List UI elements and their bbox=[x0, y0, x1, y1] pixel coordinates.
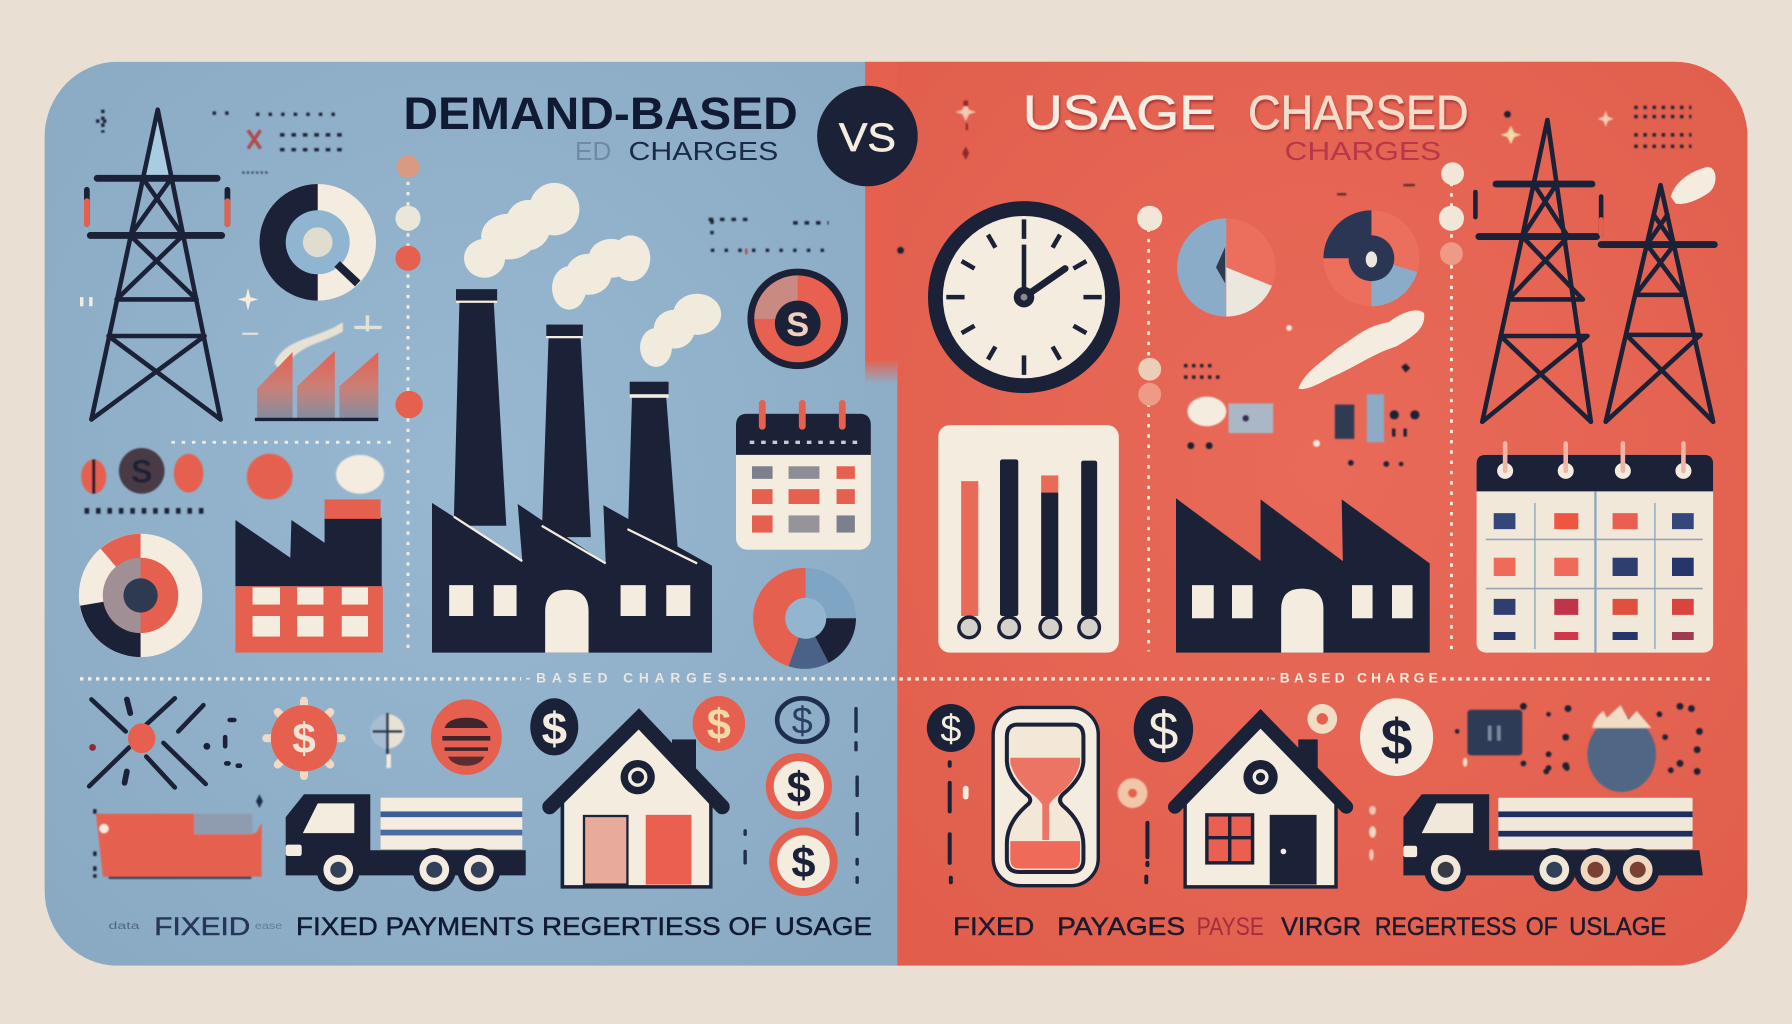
caption: right panel: VIRGR bbox=[1281, 913, 1361, 941]
icon: smoke ribbon bbox=[1298, 310, 1424, 389]
chart: donut bottom right of blue panel bbox=[753, 568, 856, 669]
small icon cluster right panel bbox=[1184, 325, 1419, 467]
icon: hourglass bbox=[993, 707, 1098, 886]
caption: left panel: data bbox=[109, 921, 140, 932]
vertical marks beside hourglass bbox=[950, 762, 1147, 882]
icon: navy dollar coin right B bbox=[1134, 696, 1193, 762]
caption: left panel bbox=[109, 913, 872, 941]
icon: mini factory roofs with smoke bbox=[255, 322, 378, 419]
chart: magnifier donut bbox=[259, 184, 376, 301]
icon: outlined dollar ring: $ bbox=[792, 700, 813, 742]
icon: smoke on right tower bbox=[1671, 167, 1716, 204]
icon: truck right bbox=[1403, 794, 1703, 891]
icon: calendar left bbox=[736, 403, 871, 550]
icon: large factory with chimneys bbox=[432, 289, 712, 653]
icon: transmission tower right B bbox=[1601, 185, 1714, 422]
icon: dollar coin gauge bbox=[747, 269, 848, 369]
icon row: small coins bbox=[81, 448, 384, 511]
icon: dollar coin stack bbox=[766, 753, 838, 896]
icon: navy dollar coin bbox=[530, 698, 578, 755]
chart: bar card bbox=[938, 425, 1119, 653]
divider with nodes left bbox=[395, 155, 423, 649]
caption: right panel bbox=[953, 913, 1666, 941]
icon: dollar gear bbox=[266, 701, 342, 776]
divider with nodes right A bbox=[1137, 206, 1162, 651]
chart: segmented donut left bbox=[79, 534, 202, 657]
icon: red oval with burger stack bbox=[431, 699, 502, 775]
icon: navy dollar coin right A: $ bbox=[940, 708, 961, 750]
badge: VS bbox=[817, 86, 918, 186]
icon: noise marks above coin bbox=[709, 219, 832, 251]
icon: dollar coin stack: $ bbox=[791, 840, 815, 888]
caption: right panel: USLAGE bbox=[1569, 913, 1666, 941]
icon: transmission tower right A bbox=[1475, 120, 1601, 422]
caption: right panel: PAYSE bbox=[1197, 913, 1264, 941]
subheading: charges left: CHARGES bbox=[629, 136, 778, 166]
caption: right panel: PAYAGES bbox=[1057, 913, 1185, 941]
icon: balloon pin bbox=[370, 713, 405, 768]
divider: horizontal dotted line with label bbox=[80, 670, 1711, 685]
icon: smoke clouds large factory bbox=[464, 183, 721, 367]
heading: demand-based: DEMAND-BASED bbox=[403, 88, 798, 139]
icon: red dollar coin: $ bbox=[707, 701, 731, 749]
icon: dollar gear: $ bbox=[292, 715, 316, 762]
icon: tiny sparkle marks bbox=[80, 288, 382, 335]
caption: right panel: FIXED bbox=[953, 913, 1034, 941]
subheading: charges left: ED bbox=[575, 136, 611, 166]
icon row: small coins: S bbox=[131, 453, 152, 489]
chart: pie B bbox=[1323, 210, 1419, 306]
icon: pot with flame bbox=[1587, 705, 1656, 792]
icon: noise marks top left bbox=[96, 110, 345, 173]
heading: usage charged: USAGE bbox=[1023, 87, 1216, 140]
panel: usage charges background bbox=[865, 62, 1747, 966]
heading: usage charged: CHARSED bbox=[1248, 87, 1469, 140]
vertical marks beside coins bbox=[745, 709, 857, 882]
badge: VS: VS bbox=[839, 116, 896, 160]
icon: calendar right bbox=[1477, 443, 1713, 653]
icon: red dollar coin bbox=[693, 696, 745, 751]
caption: right panel: REGERTESS bbox=[1375, 913, 1517, 941]
heading: usage charged bbox=[1023, 87, 1469, 140]
icon: dollar coin gauge: S bbox=[786, 306, 809, 344]
icon: cream dollar coin: $ bbox=[1381, 708, 1412, 772]
caption: left panel: FIXED PAYMENTS REGERTIESS OF USAGE bbox=[296, 913, 872, 941]
icon: navy dollar coin right A bbox=[927, 704, 975, 752]
caption: right panel: OF bbox=[1526, 913, 1558, 941]
icon: outlined dollar ring bbox=[777, 698, 827, 742]
icon: factory right panel bbox=[1176, 498, 1430, 653]
icon: red box bbox=[95, 794, 263, 878]
dotted rule middle left bbox=[171, 441, 391, 444]
icon: dollar coin stack: $ bbox=[787, 764, 811, 812]
icon: cream ring marker bbox=[1307, 704, 1337, 734]
caption: left panel: FIXEID bbox=[154, 913, 250, 941]
chart: pie A bbox=[1177, 218, 1275, 317]
icon: house left bbox=[550, 719, 722, 887]
icon: truck left bbox=[286, 794, 526, 891]
icon: cream dollar coin bbox=[1360, 698, 1433, 776]
icon: clock bbox=[928, 201, 1120, 393]
icon: house right bbox=[1175, 719, 1346, 887]
divider with nodes right B bbox=[1439, 162, 1464, 651]
icon: small factory bbox=[235, 499, 383, 653]
panel: demand-based charges background bbox=[45, 62, 897, 966]
divider: horizontal dotted line with label: -BASED CHARGES bbox=[526, 670, 727, 685]
icon: flower mark bbox=[1118, 778, 1147, 808]
caption: left panel: ease bbox=[255, 921, 283, 932]
icon: transmission tower left bbox=[87, 110, 227, 419]
icon: tiny marks near heading bbox=[897, 101, 1691, 254]
icon: network cross bbox=[89, 698, 240, 787]
icon: navy box bbox=[1467, 710, 1522, 755]
icon: navy dollar coin: $ bbox=[542, 703, 567, 754]
subheading: charges left bbox=[575, 136, 778, 166]
subheading: charges right: CHARGES bbox=[1285, 136, 1441, 166]
scattered dots right bottom bbox=[1369, 703, 1703, 861]
divider: horizontal dotted line with label: -BASED CHARGE bbox=[1271, 670, 1438, 685]
icon: navy dollar coin right B: $ bbox=[1148, 702, 1178, 762]
